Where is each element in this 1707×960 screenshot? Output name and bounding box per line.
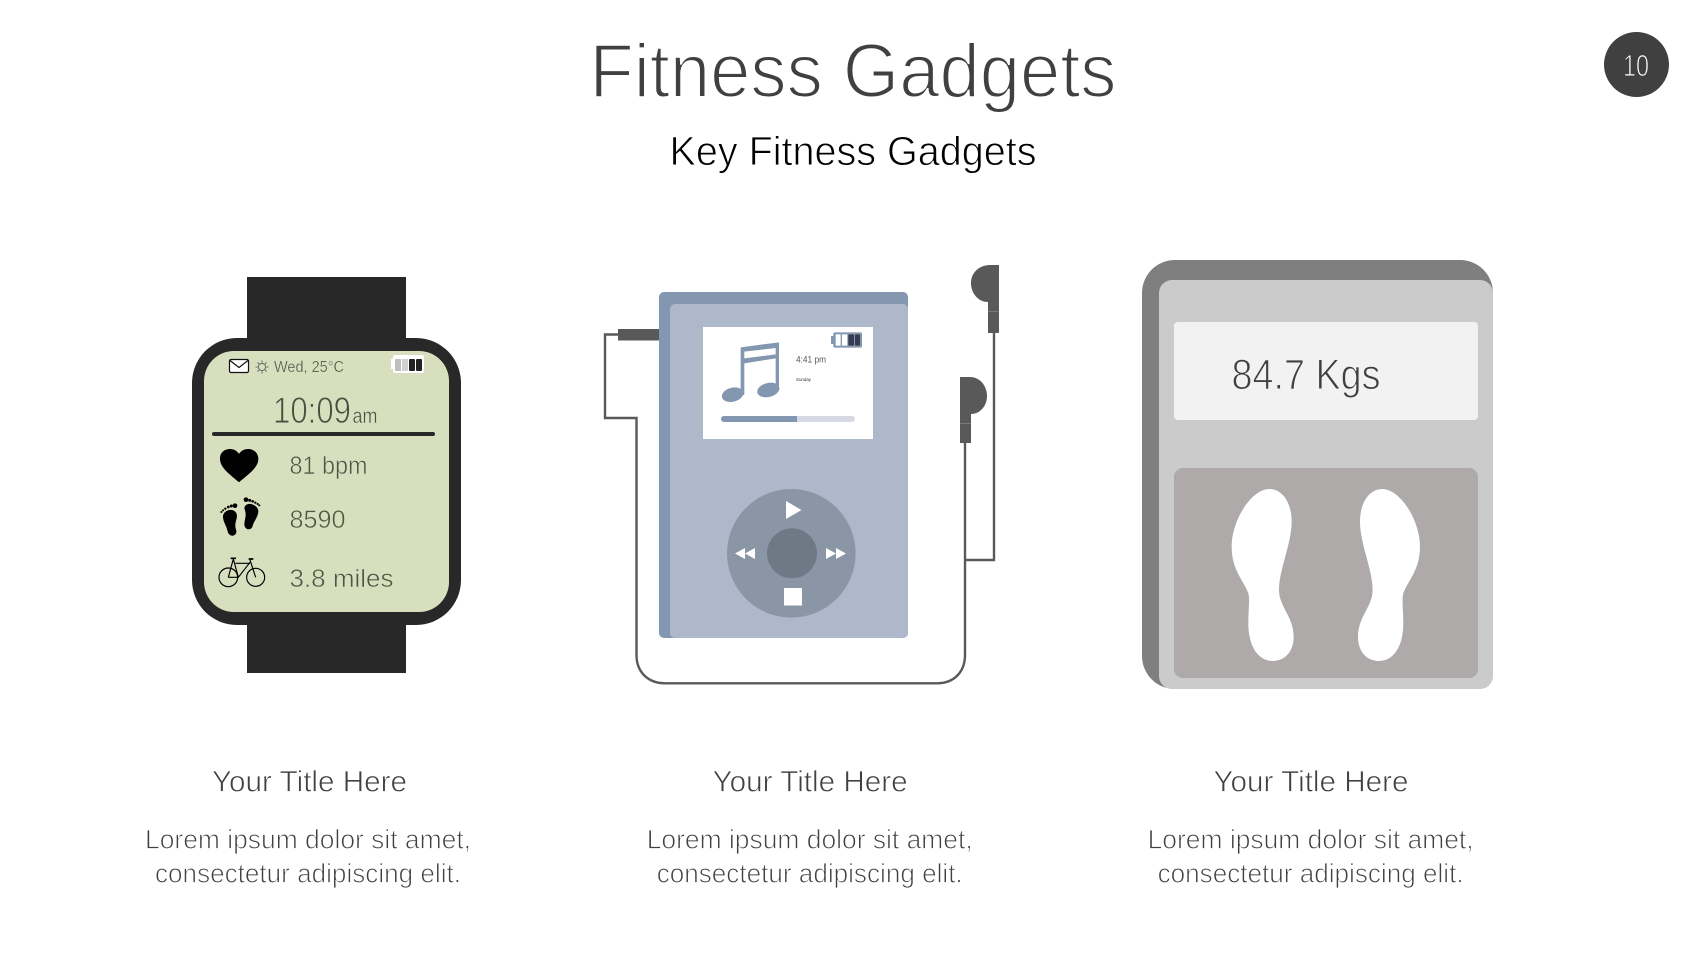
scale reading: 84.7 Kgs — [1232, 351, 1380, 399]
player clock — [796, 354, 826, 382]
player clock: 4:41 pm — [796, 354, 826, 364]
caption column 3: consectetur adipiscing elit. — [1158, 859, 1464, 889]
icon: bicycle — [219, 558, 265, 587]
caption column 3 — [1148, 766, 1474, 889]
weather text: Wed, 25°C — [274, 359, 344, 376]
player back — [659, 292, 908, 638]
caption column 1: Lorem ipsum dolor sit amet, — [145, 825, 471, 855]
scale front — [1159, 280, 1493, 689]
caption column 1 — [145, 766, 471, 889]
icon: heart — [220, 449, 258, 482]
watch screen — [204, 351, 449, 612]
icon: battery — [391, 355, 424, 373]
panel: smartwatch — [192, 277, 461, 673]
player front — [670, 304, 908, 638]
title: Fitness Gadgets — [590, 29, 1116, 114]
panel: weighing scale — [1142, 260, 1493, 689]
icon: footprints — [220, 497, 260, 536]
caption column 3: Lorem ipsum dolor sit amet, — [1148, 825, 1474, 855]
click wheel — [727, 489, 856, 618]
caption column 1: Your Title Here — [212, 766, 407, 799]
heart rate: 81 bpm — [290, 452, 368, 480]
cable — [605, 330, 994, 683]
watch body — [192, 338, 461, 625]
caption column 2 — [647, 766, 973, 889]
icon: rewind — [735, 548, 755, 559]
icon: stop — [784, 588, 802, 606]
distance: 3.8 miles — [290, 565, 394, 593]
caption column 2: consectetur adipiscing elit. — [657, 859, 963, 889]
time: 10:09 — [273, 390, 351, 431]
caption column 2: Lorem ipsum dolor sit amet, — [647, 825, 973, 855]
icon: right foot — [1358, 489, 1420, 661]
steps: 8590 — [290, 506, 346, 534]
foot pad — [1174, 468, 1478, 678]
scale back — [1142, 260, 1493, 689]
icon: fast forward — [826, 548, 846, 559]
watch strap — [247, 277, 406, 673]
page number badge — [1604, 32, 1669, 97]
icon: earbud lower — [960, 377, 987, 443]
icon: player battery — [831, 332, 862, 348]
progress bar — [721, 416, 855, 422]
caption column 2: Your Title Here — [713, 766, 908, 799]
scale display — [1174, 322, 1478, 420]
time: am — [352, 405, 378, 428]
icon: sun — [256, 360, 268, 374]
icon: play — [786, 501, 802, 519]
player screen — [703, 327, 873, 439]
player clock: Sunday — [796, 377, 812, 382]
subtitle: Key Fitness Gadgets — [670, 128, 1036, 174]
page number badge: 10 — [1623, 48, 1649, 83]
panel: music player — [605, 265, 999, 683]
icon: earbud top — [971, 265, 999, 333]
icon: mail — [230, 360, 248, 372]
icon: left foot — [1232, 489, 1294, 661]
audio jack — [618, 329, 659, 340]
caption column 1: consectetur adipiscing elit. — [155, 859, 461, 889]
caption column 3: Your Title Here — [1214, 766, 1408, 799]
icon: music note — [720, 342, 781, 404]
